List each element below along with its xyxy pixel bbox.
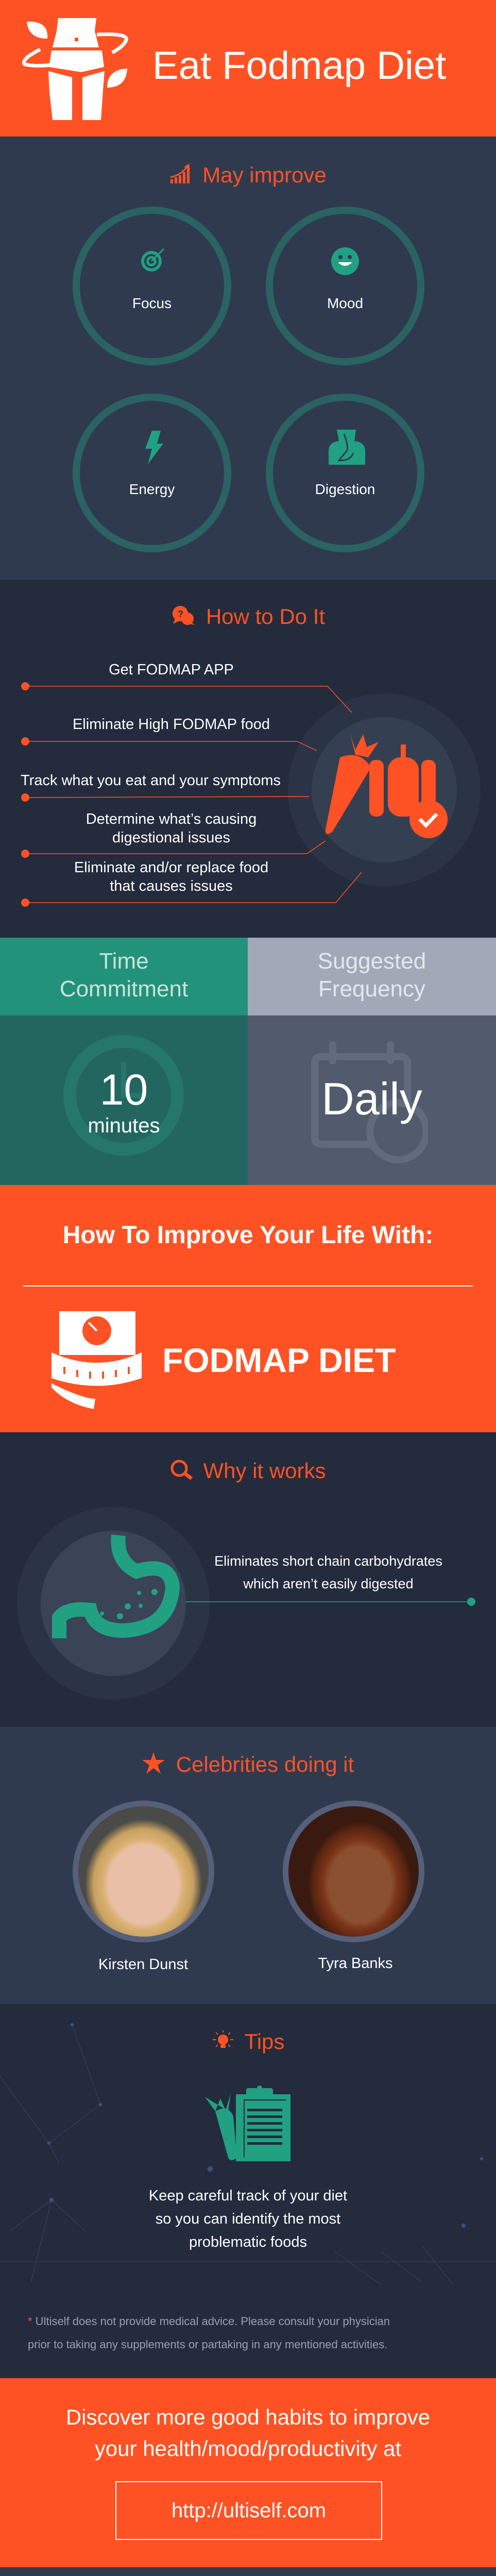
heading: may improve: May improve <box>202 163 327 187</box>
step 5: Eliminate and/or replace food <box>74 859 268 876</box>
text: reason <box>214 1553 442 1591</box>
heading: tips: Tips <box>245 2029 284 2054</box>
label: energy: Energy <box>129 481 175 497</box>
label: focus: Focus <box>132 295 172 311</box>
panel: why it works <box>0 1432 496 1727</box>
step 1: Get FODMAP APP <box>109 662 234 678</box>
step 4 <box>86 811 256 846</box>
panel: tips <box>0 2004 496 2287</box>
circle: mood <box>266 207 424 365</box>
name: kirsten dunst: Kirsten Dunst <box>98 1956 188 1973</box>
icon: waist with measuring tape <box>22 18 128 120</box>
header: suggested frequency: Frequency <box>318 976 425 1002</box>
illustration: stomach <box>17 1507 475 1700</box>
circle: digestion <box>266 394 424 552</box>
heading: why it works: Why it works <box>203 1459 326 1483</box>
body: 10 minutes: minutes <box>88 1114 160 1137</box>
header: time commitment: Time <box>99 948 149 974</box>
icon: smiley <box>331 247 359 275</box>
celebrity: kirsten dunst <box>73 1801 214 1942</box>
circle: energy <box>73 394 231 552</box>
circle: focus <box>73 207 231 365</box>
step 2: Eliminate High FODMAP food <box>73 716 270 733</box>
heading: how to do it: ? <box>178 609 183 619</box>
body: daily <box>248 1015 496 1185</box>
title: Eat Fodmap Diet <box>152 44 446 88</box>
icon: target <box>141 248 164 272</box>
body: daily: Daily <box>321 1073 422 1124</box>
cta text <box>66 2405 430 2461</box>
icon: lightning <box>145 431 163 464</box>
step 4: Determine what’s causing <box>86 811 256 827</box>
body: 10 minutes: 10 <box>100 1065 148 1114</box>
panel: how to do it <box>0 580 496 938</box>
panel: celebrities <box>0 1727 496 2004</box>
header: time commitment <box>0 938 248 1015</box>
button: url: http://ultiself.com <box>172 2499 326 2522</box>
banner subtitle: FODMAP DIET <box>162 1341 396 1379</box>
call to action <box>0 2378 496 2567</box>
text: tip: Keep careful track of your diet <box>149 2188 347 2204</box>
heading: how to do it: How to Do It <box>206 604 325 629</box>
text: tip <box>149 2188 347 2250</box>
step 5 <box>74 859 268 894</box>
step 5: that causes issues <box>110 878 233 894</box>
icon: scale with tape <box>52 1311 142 1409</box>
text: tip: so you can identify the most <box>156 2211 340 2227</box>
banner: how to improve <box>0 1185 496 1432</box>
cta text: your health/mood/productivity at <box>95 2436 401 2461</box>
body: 10 minutes <box>0 1015 248 1185</box>
illustration: veggies circle <box>21 682 481 907</box>
panel: may improve <box>0 137 496 580</box>
panel: time commitment <box>0 938 496 1185</box>
heading: tips <box>213 2029 284 2054</box>
step 4: digestional issues <box>112 829 230 846</box>
banner title: How To Improve Your Life With: <box>63 1222 433 1249</box>
header: suggested frequency <box>248 938 496 1015</box>
disclaimer <box>0 2287 496 2378</box>
text: reason: Eliminates short chain carbohydrates <box>214 1553 442 1569</box>
icon: carrot and clipboard <box>205 2086 290 2161</box>
heading: celebrities: Celebrities doing it <box>176 1752 354 1776</box>
text: tip: problematic foods <box>189 2234 307 2250</box>
name: tyra banks: Tyra Banks <box>318 1955 393 1972</box>
icon: body with stomach <box>329 430 365 465</box>
label: digestion: Digestion <box>315 481 375 497</box>
disclaimer: * Ultiself does not provide medical advice. Please consult your physician <box>28 2315 390 2328</box>
header <box>0 0 496 137</box>
button: url <box>115 2481 382 2540</box>
text: reason: which aren’t easily digested <box>243 1576 414 1591</box>
footer <box>0 2567 496 2576</box>
cta text: Discover more good habits to improve <box>66 2405 430 2429</box>
disclaimer: prior to taking any supplements or partaking in any mentioned activities. <box>28 2338 387 2351</box>
header: time commitment: Commitment <box>60 976 188 1002</box>
header: suggested frequency: Suggested <box>318 948 426 974</box>
celebrity: tyra banks <box>283 1801 424 1942</box>
step 3: Track what you eat and your symptoms <box>21 772 281 789</box>
label: mood: Mood <box>327 295 363 311</box>
